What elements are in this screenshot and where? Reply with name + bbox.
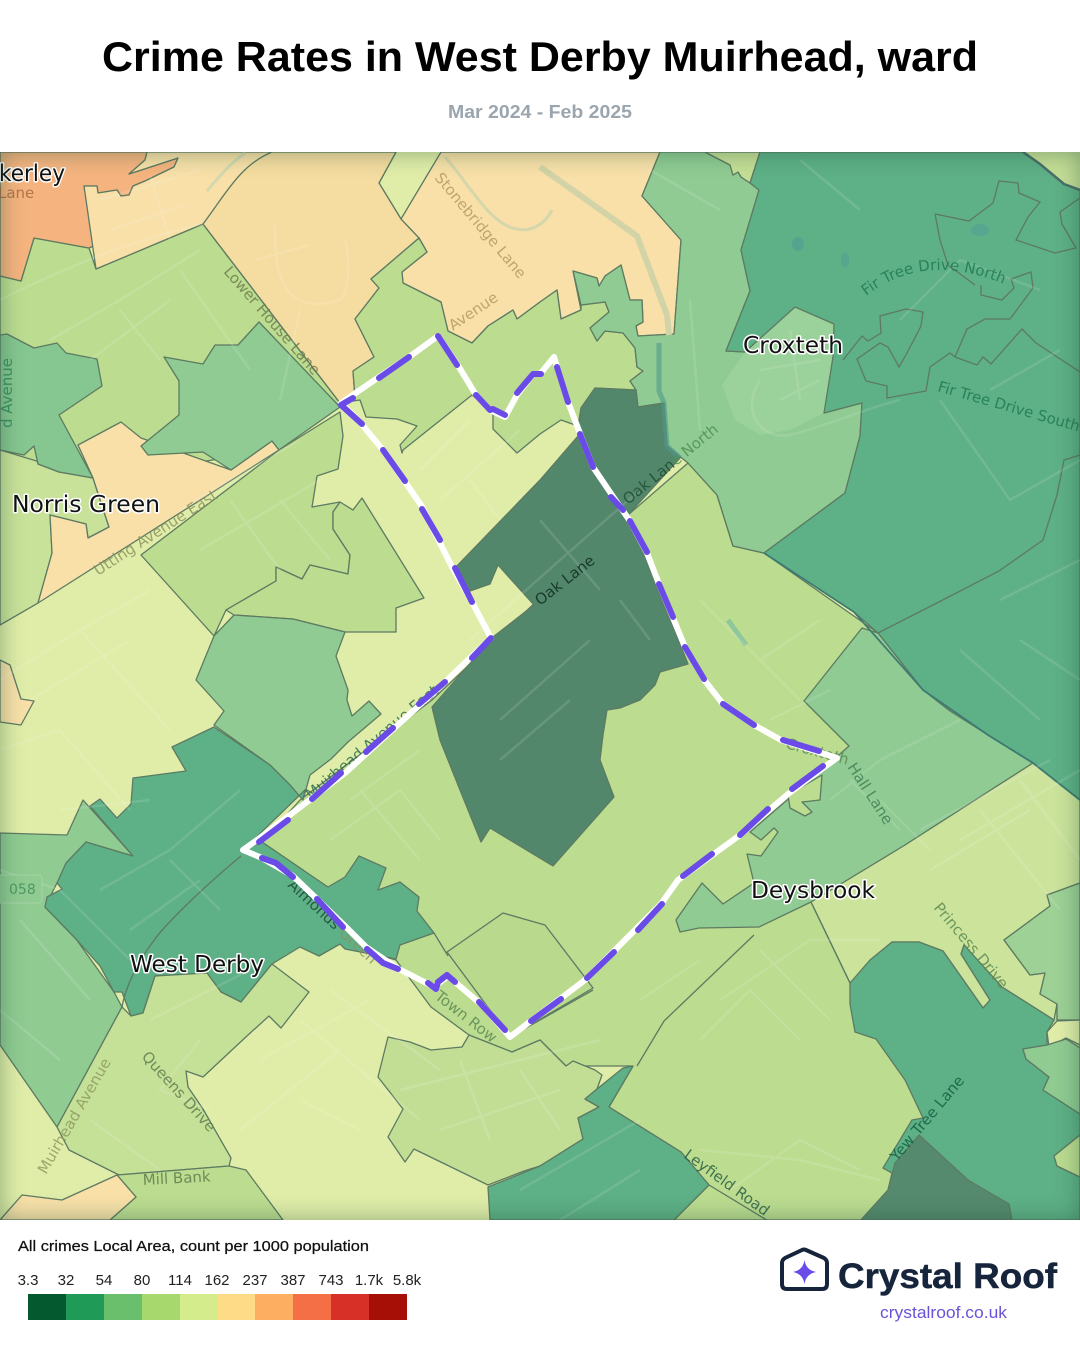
label: Stonebridge Lane: Stonebridge Lane: [431, 169, 530, 282]
label: Muirhead Avenue East: Muirhead Avenue East: [302, 681, 442, 803]
label: Oak Lane North: Oak Lane North: [619, 420, 722, 508]
place: West Derby: West Derby: [130, 952, 264, 978]
region: sand Norris Green: [38, 422, 279, 603]
region: medium green centre: [196, 615, 381, 800]
ward boundary: white base line: [243, 336, 837, 1037]
icon: house with star: [782, 1250, 827, 1289]
region: Mill Bank strip: [110, 1166, 283, 1220]
region: medium green Croxteth Hall Lane: [676, 628, 1033, 932]
legend title: All crimes Local Area, count per 1000 population: [18, 1238, 369, 1255]
label: Utting Avenue East: Utting Avenue East: [90, 486, 221, 579]
region: Croxteth lighter estate: [722, 307, 834, 435]
legend tick labels: 32: [58, 1272, 74, 1289]
region: pale east spot: [1047, 1020, 1080, 1047]
road shield: A5058: [0, 875, 42, 903]
legend tick labels: 54: [96, 1272, 112, 1289]
label: Oak Lane: Oak Lane: [531, 551, 598, 609]
legend tick labels: 743: [318, 1272, 344, 1289]
region: south of West Derby: [57, 964, 309, 1175]
region: south ward light green: [262, 463, 1080, 1220]
region: medium east: [1004, 883, 1080, 1020]
legend tick labels: 387: [280, 1272, 306, 1289]
region: small enclosed south ward: [447, 913, 593, 1037]
legend: [18, 1238, 422, 1320]
region: light south-east corner: [1054, 1135, 1080, 1177]
legend tick labels: 80: [134, 1272, 150, 1289]
region: sand north: [84, 152, 681, 403]
legend tick labels: 114: [168, 1272, 192, 1289]
region: far west medium: [0, 800, 133, 1127]
label: Croxteth: Croxteth: [784, 734, 851, 769]
dark boundary line east: [764, 553, 1080, 800]
label: Town Row: Town Row: [431, 986, 501, 1046]
place labels: [0, 161, 876, 978]
region: north ward light green: [340, 238, 643, 453]
label: Avenue: Avenue: [445, 288, 501, 334]
place: kerley: kerley: [0, 161, 65, 187]
region: medium green centre-west: [141, 322, 340, 470]
region: Yew Tree green: [850, 942, 1080, 1220]
region: dark green Yew Tree: [861, 1135, 1012, 1220]
region: medium green far west: [0, 334, 102, 478]
region: sand south-west: [0, 1175, 136, 1220]
place: Norris Green: Norris Green: [12, 492, 160, 518]
legend tick labels: 1.7k: [355, 1272, 384, 1289]
legend tick labels: 162: [204, 1272, 230, 1289]
legend tick labels: [18, 1272, 422, 1289]
logo: Crystal Roof: [782, 1250, 1057, 1322]
region: dark green Oak Lane: [432, 388, 688, 866]
label: Fir Tree Drive South: Fir Tree Drive South: [936, 378, 1080, 435]
legend tick labels: 5.8k: [393, 1272, 422, 1289]
region: Fir Tree Drive green: [726, 152, 1080, 800]
label: Queens Drive: Queens Drive: [138, 1048, 220, 1135]
district boundary lines: [122, 181, 1080, 1222]
region: medium south-east: [1023, 1039, 1080, 1114]
label: Lower House Lane: Lower House Lane: [220, 263, 324, 379]
subtitle: date range: Mar 2024 - Feb 2025: [448, 102, 632, 122]
region: sand sliver west: [0, 660, 34, 725]
choropleth map: [0, 152, 1080, 1220]
region: south centre light green: [378, 1035, 602, 1185]
region: sand parkland: [203, 152, 419, 403]
faint road network: [0, 160, 1080, 1220]
label: Princess Drive: Princess Drive: [930, 899, 1012, 992]
region: Leyfield Road green: [488, 1066, 709, 1220]
label: Fir Tree Drive North: Fir Tree Drive North: [860, 258, 1005, 295]
region: West Derby green: [45, 727, 434, 1016]
region: Princess Drive light green: [811, 763, 1080, 1020]
legend colour scale: [28, 1294, 407, 1320]
region: Norris Green west: [0, 446, 109, 625]
water and canal: [207, 152, 1080, 645]
road shield: A5058: 058: [9, 882, 36, 898]
legend tick labels: 237: [242, 1272, 268, 1289]
label: Almonds Green: Almonds Green: [284, 876, 381, 968]
region: south of Utting Avenue: [141, 412, 350, 636]
region: north-west light green: [0, 224, 340, 478]
region: lime top corner: [705, 152, 760, 183]
website url: crystalroof.co.uk: [880, 1304, 1008, 1322]
title: Crime Rates in West Derby Muirhead, ward: [102, 33, 978, 80]
region: medium green north-east strip: [573, 152, 862, 553]
label: Yew Tree Lane: Yew Tree Lane: [886, 1072, 968, 1165]
ward boundary: purple dashes: [259, 336, 823, 1030]
road labels: [0, 172, 1079, 1216]
legend tick labels: 3.3: [18, 1272, 38, 1289]
region: inner light green: [226, 498, 424, 632]
wordmark: Crystal Roof: [838, 1257, 1057, 1296]
region: lime top-right corner: [1023, 152, 1080, 190]
region: lime patches by path: [788, 775, 822, 816]
label: Hall Lane: Hall Lane: [844, 759, 897, 828]
place: Croxteth: Croxteth: [743, 333, 843, 359]
label: Mill Bank: Mill Bank: [142, 1167, 211, 1189]
label: Muirhead Avenue south: Muirhead Avenue: [34, 1055, 115, 1177]
label: Leyfield Road: Leyfield Road: [681, 1146, 773, 1220]
region: orange top-left: [0, 152, 178, 281]
place: Deysbrook: Deysbrook: [751, 878, 876, 904]
